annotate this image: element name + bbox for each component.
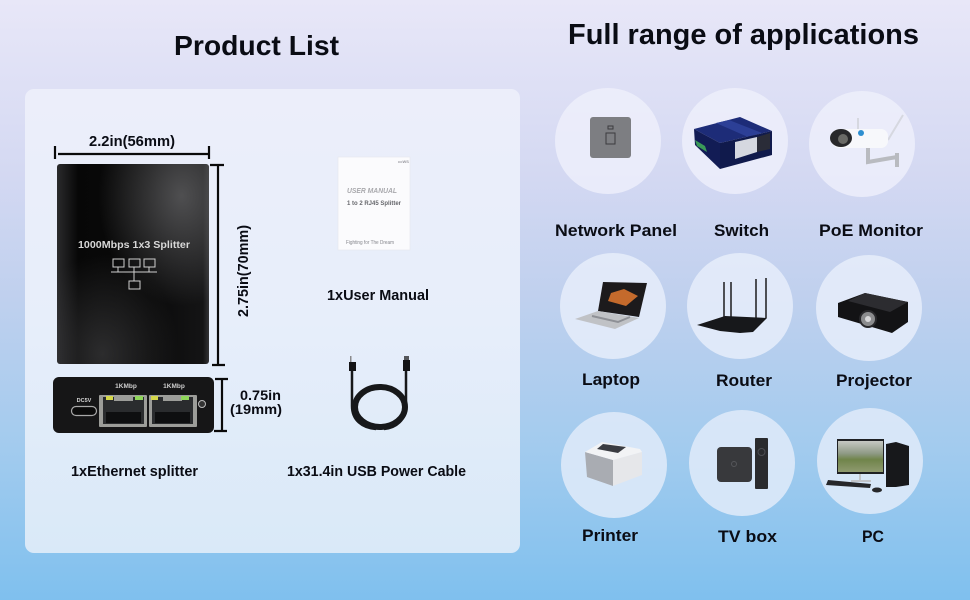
- title: Full range of applications: Full range of applications: [568, 19, 919, 51]
- depth dimension: [214, 379, 282, 431]
- label: user manual: 1xUser Manual: [327, 288, 429, 304]
- application: TV box: TV box: [718, 527, 778, 546]
- application: PoE Monitor: PoE Monitor: [819, 221, 923, 240]
- width dimension: 2.2in(56mm): [89, 134, 175, 150]
- application: Switch: Switch: [714, 221, 769, 240]
- application: Router: [687, 253, 793, 390]
- label: Ethernet splitter: 1xEthernet splitter: [71, 464, 198, 480]
- application: Switch: [682, 88, 788, 240]
- application: Projector: [816, 255, 922, 390]
- depth dimension: (19mm): [230, 402, 282, 417]
- application: Laptop: Laptop: [582, 370, 640, 389]
- application: Projector: Projector: [836, 371, 912, 390]
- splitter front view: 1KMbp: [163, 383, 185, 390]
- user manual: ccWS: [398, 159, 409, 164]
- title: Product List: Product List: [174, 30, 339, 61]
- splitter top view: [57, 164, 209, 364]
- application: Router: Router: [716, 371, 772, 390]
- width dimension: [55, 134, 209, 159]
- splitter front view: DC5V: [77, 398, 92, 404]
- application: Network Panel: [555, 88, 677, 240]
- application: Network Panel: Network Panel: [555, 221, 677, 240]
- panel: product list: [25, 89, 520, 553]
- user manual: USER MANUAL: [347, 188, 397, 195]
- application: PC: [817, 408, 923, 546]
- application: TV box: [689, 410, 795, 546]
- application: PoE Monitor: [809, 91, 923, 240]
- height dimension: [210, 165, 252, 365]
- splitter top view: 1000Mbps 1x3 Splitter: [78, 240, 190, 251]
- application: PC: PC: [862, 527, 884, 546]
- user manual: Fighting for The Dream: [346, 240, 394, 246]
- application: Printer: Printer: [582, 526, 638, 545]
- splitter front view: [53, 377, 214, 433]
- user manual: [338, 157, 410, 250]
- user manual: 1 to 2 RJ45 Splitter: [347, 201, 402, 207]
- label: USB power cable: 1x31.4in USB Power Cable: [287, 464, 466, 480]
- depth dimension: 0.75in: [240, 388, 281, 403]
- application: Printer: [561, 412, 667, 545]
- USB power cable: [349, 356, 410, 429]
- height dimension: 2.75in(70mm): [236, 225, 252, 317]
- application: Laptop: [560, 253, 666, 389]
- splitter front view: 1KMbp: [115, 383, 137, 390]
